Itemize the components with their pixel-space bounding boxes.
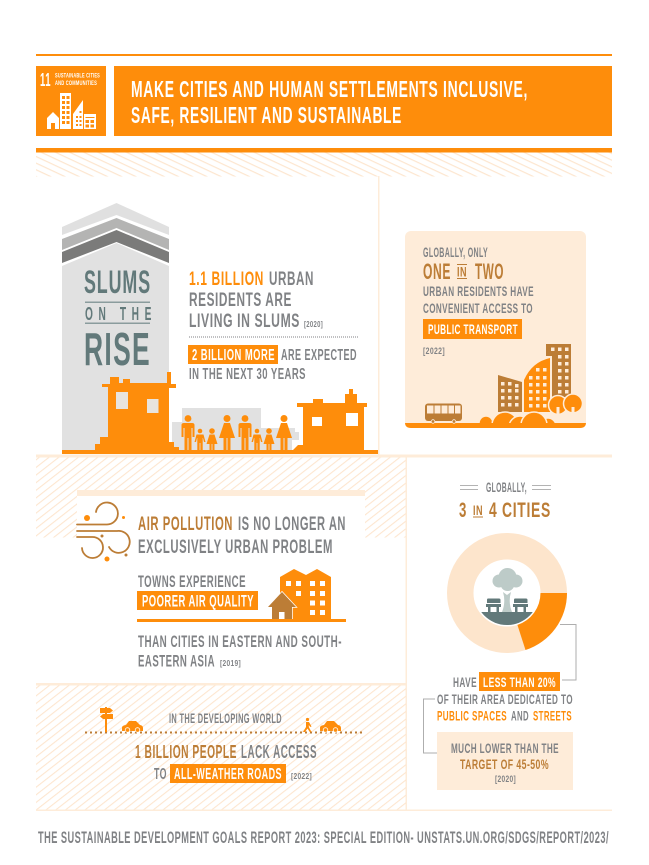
right slum house (293, 389, 367, 450)
SDG 11 badge: SUSTAINABLE CITIES (55, 74, 100, 80)
slums on the rise heading: RISE (84, 323, 151, 375)
slums statistic text: IN THE NEXT 30 YEARS (189, 366, 306, 383)
heading: 3 in 4 cities: 4 CITIES (489, 499, 551, 522)
panel: public transport (405, 231, 586, 438)
less than 20 percent text: STREETS (533, 708, 572, 724)
roads statistic text: [2022] (291, 771, 312, 781)
eastern asia comparison text: EASTERN ASIA (138, 652, 215, 670)
heading: 3 in 4 cities: 3 (459, 499, 467, 522)
roads statistic text: 1 BILLION PEOPLE (135, 741, 237, 762)
person: woman (276, 415, 292, 450)
ground strip with rounded base (405, 422, 586, 428)
title banner (114, 66, 612, 136)
slums statistic text: ARE EXPECTED (281, 347, 357, 364)
trees (548, 394, 582, 424)
icon: wind and particles (77, 503, 130, 562)
public transport text (423, 244, 534, 356)
roads statistic text: TO (154, 766, 167, 783)
family of people (182, 415, 292, 450)
public transport text: TWO (475, 259, 504, 284)
person: man (182, 415, 194, 450)
title banner: SAFE, RESILIENT AND SUSTAINABLE (131, 102, 402, 128)
panel: air pollution (77, 490, 365, 680)
icon: bus (425, 404, 462, 423)
towns experience poorer air quality: TOWNS EXPERIENCE (138, 573, 246, 591)
slums statistic text: [2020] (304, 319, 323, 329)
icon: car (122, 721, 143, 732)
road with icons (85, 707, 364, 732)
connector line to target (424, 699, 437, 753)
slums statistic text: 2 BILLION MORE (192, 347, 275, 364)
panel: public spaces (424, 479, 576, 790)
person: girl (206, 428, 218, 450)
air pollution heading: EXCLUSIVELY URBAN PROBLEM (138, 536, 333, 558)
public transport text: ONE (423, 259, 451, 284)
slums on the rise heading (84, 264, 157, 375)
SDG 11 badge (36, 66, 106, 136)
less than 20 percent text: HAVE (453, 674, 477, 690)
slums statistic text: LIVING IN SLUMS (189, 310, 300, 332)
eastern asia comparison text: [2019] (220, 658, 241, 668)
heading: 3 in 4 cities (459, 479, 551, 522)
roads statistic text: LACK ACCESS (241, 741, 317, 762)
slums statistic text: RESIDENTS ARE (189, 289, 292, 311)
person: child (194, 429, 206, 450)
slums statistic text (188, 268, 358, 383)
connector line to percentage (560, 624, 576, 680)
air pollution heading (138, 513, 346, 558)
icon: car (320, 721, 341, 732)
public transport text: IN (457, 264, 467, 280)
slums statistic text: URBAN (269, 268, 314, 290)
rising building with chevrons (62, 203, 169, 450)
less than 20 percent text: PUBLIC SPACES (437, 708, 507, 724)
eastern asia comparison text (138, 632, 342, 670)
left slum house (95, 372, 179, 450)
target callout: MUCH LOWER THAN THE (451, 740, 559, 756)
icon: town buildings and house (137, 569, 346, 622)
eastern asia comparison text: THAN CITIES IN EASTERN AND SOUTH- (138, 632, 342, 651)
heading: 3 in 4 cities: GLOBALLY, (486, 479, 527, 495)
slums on the rise heading: ON THE (85, 304, 157, 324)
less than 20 percent text: AND (511, 708, 529, 724)
less than 20 percent text: LESS THAN 20% (483, 674, 556, 690)
panel: all-weather roads (85, 707, 364, 783)
icon: pedestrian (303, 718, 312, 732)
donut chart (460, 546, 567, 650)
SDG 11 badge: 11 (40, 70, 51, 90)
less than 20 percent text (437, 672, 573, 724)
road with icons: IN THE DEVELOPING WORLD (169, 710, 282, 726)
slums on the rise heading: SLUMS (84, 264, 151, 300)
towns experience poorer air quality: POORER AIR QUALITY (142, 592, 254, 610)
public transport text: PUBLIC TRANSPORT (428, 321, 518, 337)
person: girl (264, 428, 274, 450)
city buildings (498, 344, 571, 412)
public transport text: [2022] (423, 346, 445, 356)
public transport text: CONVENIENT ACCESS TO (423, 300, 533, 316)
background skyline (172, 408, 299, 450)
target callout: [2020] (495, 774, 516, 784)
slums statistic text: 1.1 BILLION (189, 268, 264, 290)
towns experience poorer air quality (137, 573, 258, 610)
icon: signpost (100, 707, 113, 732)
heading: 3 in 4 cities: IN (473, 502, 483, 518)
air pollution heading: AIR POLLUTION (138, 513, 233, 535)
person: man (238, 415, 252, 450)
icon: park with tree and benches (481, 568, 533, 625)
target callout: TARGET OF 45-50% (460, 756, 549, 772)
public transport text: GLOBALLY, ONLY (423, 244, 488, 260)
roads statistic text (135, 741, 317, 783)
bushes (480, 411, 554, 423)
target callout (437, 732, 573, 790)
person: child (252, 429, 262, 450)
air pollution heading: IS NO LONGER AN (238, 513, 346, 535)
panel: slums on the rise (62, 203, 378, 454)
SDG 11 badge: AND COMMUNITIES (55, 81, 97, 87)
person: woman (219, 415, 235, 450)
public transport text: URBAN RESIDENTS HAVE (423, 283, 534, 299)
roads statistic text: ALL-WEATHER ROADS (174, 766, 282, 783)
ground strip (62, 450, 378, 454)
